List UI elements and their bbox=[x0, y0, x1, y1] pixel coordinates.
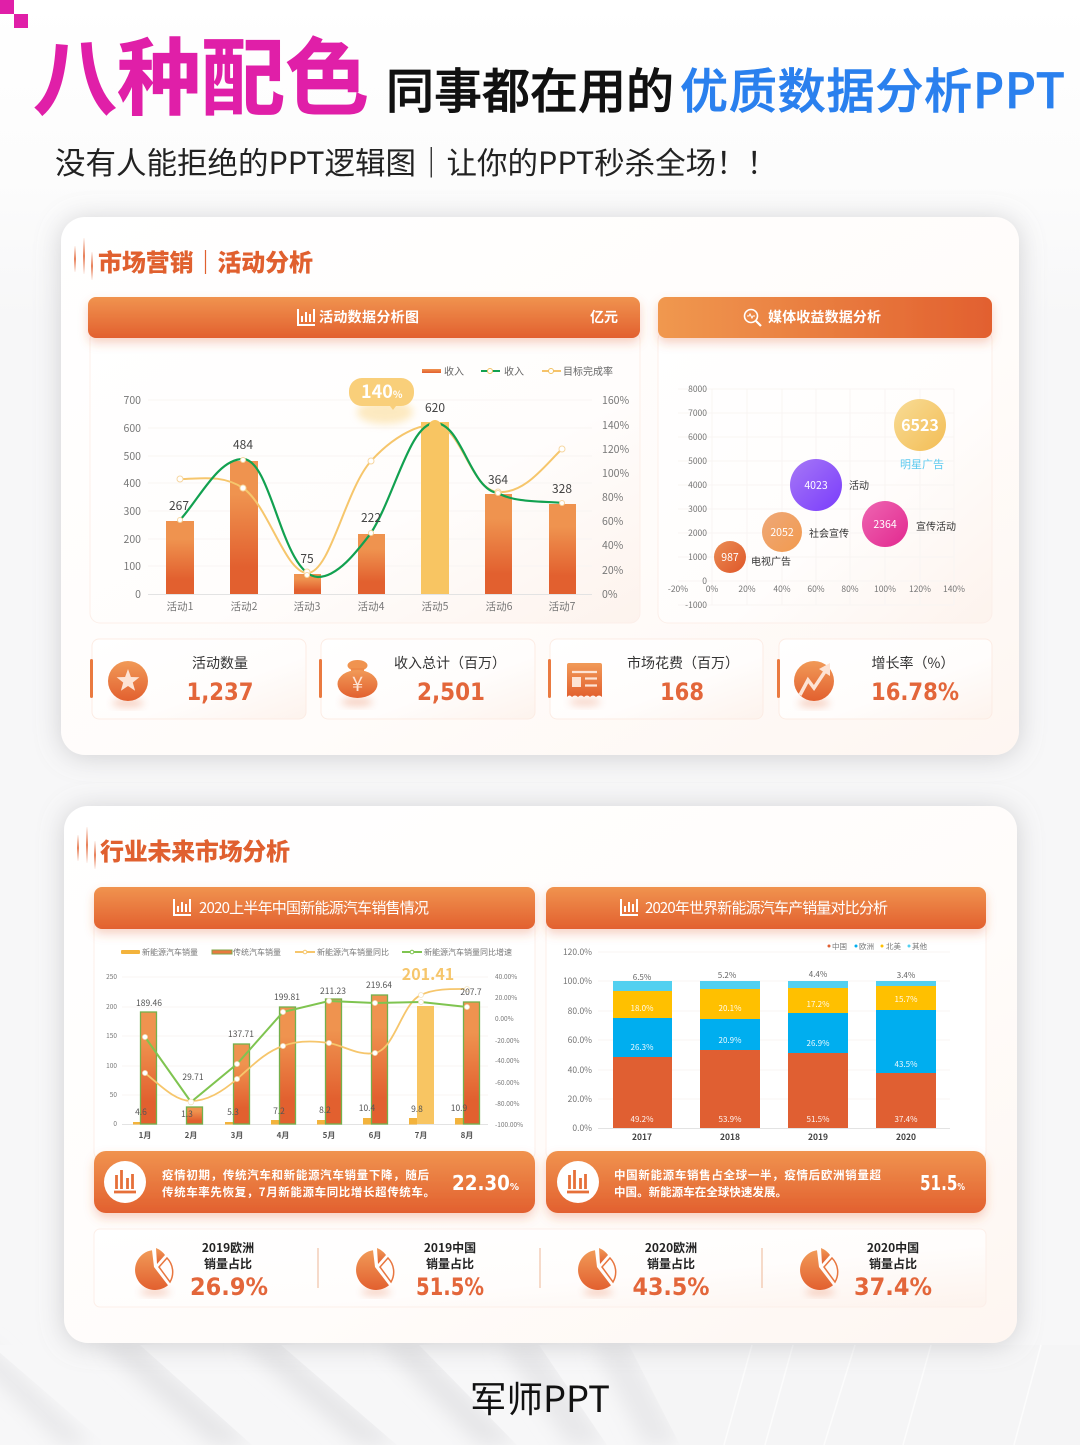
combo chart: bars and lines: 120% bbox=[602, 442, 629, 457]
legend bbox=[422, 363, 613, 378]
bubble chart: 60% bbox=[807, 583, 825, 595]
stat strip: sales share bbox=[94, 1229, 986, 1307]
stacked bar chart: 40.0% bbox=[568, 1064, 592, 1076]
combo chart: bars and lines: 活动4 bbox=[358, 599, 385, 614]
icon: corner pixel squares bbox=[0, 0, 28, 28]
legend: 传统汽车销量 bbox=[233, 947, 281, 958]
KPI card: activity count: 1,237 bbox=[186, 678, 254, 706]
KPI card: marketing spend bbox=[548, 639, 763, 719]
panel: media revenue card bbox=[658, 297, 992, 623]
combo chart: bars and lines: 60% bbox=[602, 514, 624, 529]
header bar: activity chart: 活动数据分析图 bbox=[319, 307, 419, 327]
stacked bar chart: 120.0% bbox=[563, 946, 592, 958]
bubble chart: 20% bbox=[738, 583, 756, 595]
callout bar: China sales insight bbox=[94, 1151, 535, 1213]
combo chart: monthly sales: -20.00% bbox=[495, 1035, 519, 1045]
legend: 新能源汽车销量同比增速 bbox=[424, 947, 512, 958]
combo chart: monthly sales: 5月 bbox=[323, 1130, 335, 1141]
combo chart: monthly sales: 201.41 bbox=[402, 961, 454, 985]
stat: 2019 China: 2019中国 bbox=[424, 1239, 476, 1256]
combo chart: bars and lines: 140% bbox=[602, 418, 629, 433]
combo chart: bars and lines: 活动6 bbox=[486, 599, 513, 614]
heading: marketing: 市场营销｜活动分析 bbox=[98, 243, 313, 278]
title: 八种配色 bbox=[33, 12, 369, 133]
stacked bar chart: 20.0% bbox=[568, 1093, 592, 1105]
bubble chart: 2364 bbox=[873, 517, 897, 532]
title bbox=[33, 12, 1065, 133]
combo chart: bars and lines: 222 bbox=[361, 509, 381, 526]
combo chart: bars and lines: 484 bbox=[233, 436, 253, 453]
header bar: China sales: 2020上半年中国新能源汽车销售情况 bbox=[199, 897, 429, 918]
stacked bar chart: 37.4% bbox=[895, 1114, 918, 1125]
legend bbox=[121, 947, 512, 958]
bubble chart: 电视广告 bbox=[751, 553, 791, 568]
combo chart: monthly sales bbox=[106, 961, 523, 1141]
combo chart: bars and lines: 活动5 bbox=[422, 599, 449, 614]
bubble chart: 2000 bbox=[688, 527, 707, 539]
combo chart: monthly sales: 211.23 bbox=[320, 985, 346, 997]
combo chart: monthly sales: 10.4 bbox=[359, 1102, 376, 1114]
panel: marketing activity analysis bbox=[61, 217, 1019, 755]
bubble chart: 80% bbox=[841, 583, 859, 595]
combo chart: bars and lines: 活动7 bbox=[549, 599, 576, 614]
bubble chart: 8000 bbox=[688, 383, 707, 395]
combo chart: monthly sales: 1月 bbox=[139, 1130, 151, 1141]
combo chart: bars and lines: 100 bbox=[124, 559, 141, 574]
bubble chart: 6000 bbox=[688, 431, 707, 443]
panel: China sales card bbox=[94, 887, 535, 1160]
combo chart: bars and lines: 75 bbox=[300, 550, 314, 567]
stacked bar chart: 20.9% bbox=[719, 1035, 742, 1046]
combo chart: monthly sales: -60.00% bbox=[495, 1077, 519, 1087]
stat: 2020 China: 2020中国 bbox=[867, 1239, 919, 1256]
stacked bar chart: 2018 bbox=[720, 1131, 740, 1143]
combo chart: monthly sales: 207.7 bbox=[460, 986, 482, 998]
legend: 目标完成率 bbox=[563, 363, 613, 378]
legend: 新能源汽车销量 bbox=[142, 947, 198, 958]
legend: 收入 bbox=[504, 363, 524, 378]
combo chart: monthly sales: -100.00% bbox=[495, 1119, 523, 1129]
combo chart: monthly sales: 100 bbox=[106, 1060, 117, 1070]
bubble chart: 2052 bbox=[770, 525, 794, 540]
stacked bar chart: 5.2% bbox=[718, 970, 737, 981]
combo chart: monthly sales: 4月 bbox=[277, 1130, 289, 1141]
bubble chart: 0 bbox=[702, 575, 707, 587]
combo chart: monthly sales: 8月 bbox=[461, 1130, 473, 1141]
bubble chart: 社会宣传 bbox=[809, 525, 849, 540]
header bar: activity chart: 亿元 bbox=[590, 307, 618, 327]
combo chart: monthly sales: 50 bbox=[110, 1089, 117, 1099]
stacked bar chart: 0.0% bbox=[572, 1122, 592, 1134]
combo chart: monthly sales: 219.64 bbox=[366, 979, 392, 991]
stat: 2020 Europe: 2020欧洲 bbox=[645, 1239, 697, 1256]
stacked bar chart: 26.3% bbox=[631, 1042, 654, 1053]
combo chart: monthly sales: 1.3 bbox=[181, 1108, 193, 1120]
KPI card: activity count: 活动数量 bbox=[192, 653, 248, 673]
stat: 2020 Europe bbox=[578, 1239, 710, 1301]
bubble chart: 3000 bbox=[688, 503, 707, 515]
legend bbox=[828, 941, 927, 952]
KPI card: activity count bbox=[90, 639, 306, 719]
callout: 140%: 140% bbox=[361, 378, 403, 404]
KPI card: total revenue bbox=[319, 639, 535, 719]
KPI card: total revenue: 2,501 bbox=[417, 678, 485, 706]
legend: 中国 bbox=[832, 941, 847, 952]
stacked bar chart: 2020 bbox=[896, 1131, 916, 1143]
stat: 2020 China: 37.4% bbox=[854, 1273, 932, 1301]
combo chart: monthly sales: 8.2 bbox=[319, 1104, 331, 1116]
header bar: world production: 2020年世界新能源汽车产销量对比分析 bbox=[645, 897, 888, 918]
combo chart: bars and lines: 600 bbox=[124, 421, 141, 436]
combo chart: monthly sales: 7月 bbox=[415, 1130, 427, 1141]
stat: 2020 Europe: 销量占比 bbox=[647, 1255, 695, 1272]
bubble chart: 明星广告 bbox=[900, 456, 944, 472]
legend: 其他 bbox=[912, 941, 927, 952]
stacked bar chart: 51.5% bbox=[807, 1114, 830, 1125]
combo chart: bars and lines: 700 bbox=[124, 393, 141, 408]
bubble chart: 140% bbox=[943, 583, 965, 595]
stacked bar chart: 53.9% bbox=[719, 1114, 742, 1125]
stacked bar chart: 6.5% bbox=[633, 972, 652, 983]
combo chart: monthly sales: 0.00% bbox=[495, 1013, 514, 1023]
combo chart: bars and lines: 160% bbox=[602, 393, 629, 408]
stacked bar chart: 49.2% bbox=[631, 1114, 654, 1125]
callout bar: China sales insight: 22.30% bbox=[452, 1171, 519, 1195]
stacked bar chart: 20.1% bbox=[719, 1003, 742, 1014]
combo chart: bars and lines: 20% bbox=[602, 563, 624, 578]
stacked bar chart: 3.4% bbox=[897, 970, 916, 981]
KPI card: growth rate bbox=[777, 639, 992, 719]
combo chart: monthly sales: 250 bbox=[106, 971, 117, 981]
stacked bar chart bbox=[563, 946, 950, 1143]
combo chart: monthly sales: 199.81 bbox=[274, 991, 300, 1003]
stacked bar chart: 4.4% bbox=[809, 969, 828, 980]
combo chart: bars and lines: 80% bbox=[602, 490, 624, 505]
bubble chart: 4000 bbox=[688, 479, 707, 491]
stacked bar chart: 80.0% bbox=[568, 1005, 592, 1017]
callout bar: China sales insight: 疫情初期，传统汽车和新能源汽车销量下降，随后 bbox=[162, 1167, 430, 1183]
combo chart: monthly sales: 6月 bbox=[369, 1130, 381, 1141]
stacked bar chart: 2019 bbox=[808, 1131, 828, 1143]
legend: 北美 bbox=[886, 941, 901, 952]
combo chart: bars and lines: 400 bbox=[124, 476, 141, 491]
stat: 2019 China: 销量占比 bbox=[426, 1255, 474, 1272]
KPI card: growth rate: 增长率（%） bbox=[872, 653, 954, 673]
combo chart: bars and lines: 100% bbox=[602, 466, 629, 481]
panel: activity chart card bbox=[88, 297, 640, 623]
KPI card: marketing spend: 市场花费（百万） bbox=[627, 653, 739, 673]
KPI card: marketing spend: 168 bbox=[660, 678, 704, 706]
stacked bar chart: 15.7% bbox=[895, 994, 918, 1005]
bubble chart: 6523 bbox=[901, 412, 939, 436]
stacked bar chart: 18.0% bbox=[631, 1003, 654, 1014]
combo chart: monthly sales: 137.71 bbox=[228, 1028, 254, 1040]
callout: 140% bbox=[349, 378, 414, 424]
bubble chart bbox=[668, 383, 965, 611]
legend: 新能源汽车销量同比 bbox=[317, 947, 389, 958]
header bar: media revenue: 媒体收益数据分析 bbox=[768, 307, 881, 327]
header bar: activity chart bbox=[88, 297, 640, 338]
KPI card: total revenue: ¥ bbox=[352, 668, 363, 697]
combo chart: monthly sales: 10.9 bbox=[451, 1102, 468, 1114]
combo chart: monthly sales: 9.8 bbox=[411, 1103, 423, 1115]
combo chart: bars and lines: 0 bbox=[135, 587, 141, 602]
stacked bar chart: 43.5% bbox=[895, 1059, 918, 1070]
legend: 收入 bbox=[444, 363, 464, 378]
stat: 2019 China bbox=[356, 1239, 484, 1301]
combo chart: bars and lines: 300 bbox=[124, 504, 141, 519]
panel: industry market analysis bbox=[64, 806, 1017, 1343]
combo chart: monthly sales: 200 bbox=[106, 1001, 117, 1011]
bubble chart: 987 bbox=[721, 550, 739, 565]
bubble chart: 100% bbox=[874, 583, 896, 595]
combo chart: bars and lines: 200 bbox=[124, 532, 141, 547]
stat: 2019 Europe: 2019欧洲 bbox=[202, 1239, 254, 1256]
bubble chart: 7000 bbox=[688, 407, 707, 419]
stacked bar chart: 100.0% bbox=[563, 975, 592, 987]
stacked bar chart: 2017 bbox=[632, 1131, 652, 1143]
stat: 2019 China: 51.5% bbox=[416, 1273, 484, 1301]
stacked bar chart: 60.0% bbox=[568, 1034, 592, 1046]
combo chart: bars and lines: 0% bbox=[602, 587, 618, 602]
combo chart: bars and lines: 620 bbox=[425, 399, 445, 416]
subtitle: 没有人能拒绝的PPT逻辑图｜让你的PPT秒杀全场！！ bbox=[55, 139, 777, 183]
combo chart: bars and lines: 328 bbox=[552, 480, 572, 497]
bubble chart: 活动 bbox=[849, 477, 869, 492]
bubble chart: 1000 bbox=[688, 551, 707, 563]
combo chart: bars and lines bbox=[124, 393, 629, 614]
stacked bar chart: 26.9% bbox=[807, 1038, 830, 1049]
combo chart: monthly sales: 2月 bbox=[185, 1130, 197, 1141]
stat: 2020 China bbox=[800, 1239, 932, 1301]
combo chart: bars and lines: 活动2 bbox=[231, 599, 258, 614]
callout bar: world insight: 中国新能源车销售占全球一半，疫情后欧洲销量超 bbox=[614, 1167, 882, 1183]
KPI card: total revenue: 收入总计（百万） bbox=[394, 653, 506, 673]
combo chart: bars and lines: 267 bbox=[169, 497, 189, 514]
combo chart: bars and lines: 364 bbox=[488, 471, 508, 488]
callout bar: world insight: 51.5% bbox=[920, 1171, 965, 1195]
bubble chart: 4023 bbox=[804, 478, 828, 493]
bubble chart: 宣传活动 bbox=[916, 518, 956, 533]
KPI card: growth rate: 16.78% bbox=[871, 678, 959, 706]
legend: 欧洲 bbox=[859, 941, 874, 952]
combo chart: monthly sales: 3月 bbox=[231, 1130, 243, 1141]
stacked bar chart: 17.2% bbox=[807, 999, 830, 1010]
combo chart: monthly sales: 5.3 bbox=[227, 1106, 239, 1118]
combo chart: monthly sales: -40.00% bbox=[495, 1055, 519, 1065]
bubble chart: 0% bbox=[706, 583, 718, 595]
combo chart: monthly sales: 189.46 bbox=[136, 997, 162, 1009]
combo chart: bars and lines: 活动3 bbox=[294, 599, 321, 614]
combo chart: bars and lines: 活动1 bbox=[167, 599, 194, 614]
header bar: China sales bbox=[94, 887, 535, 929]
stat: 2019 Europe bbox=[135, 1239, 268, 1301]
stat: 2020 Europe: 43.5% bbox=[632, 1273, 710, 1301]
combo chart: monthly sales: 29.71 bbox=[182, 1071, 204, 1083]
bubble chart: 5000 bbox=[688, 455, 707, 467]
bubble chart: 40% bbox=[773, 583, 791, 595]
footer credit: 军师PPT bbox=[470, 1371, 610, 1423]
combo chart: monthly sales: 4.6 bbox=[135, 1106, 147, 1118]
callout bar: China sales insight: 传统车率先恢复，7月新能源车同比增长超传统车。 bbox=[162, 1184, 435, 1200]
title: 同事都在用的 bbox=[386, 52, 674, 122]
bubble chart: 120% bbox=[909, 583, 931, 595]
stat: 2020 China: 销量占比 bbox=[869, 1255, 917, 1272]
bubble chart: -1000 bbox=[685, 599, 707, 611]
combo chart: monthly sales: 40.00% bbox=[495, 971, 517, 981]
header bar: world production bbox=[546, 887, 986, 929]
callout bar: world insight: 中国。新能源车在全球快速发展。 bbox=[614, 1184, 787, 1200]
stat: 2019 Europe: 26.9% bbox=[190, 1273, 268, 1301]
bubble chart: -20% bbox=[668, 583, 688, 595]
combo chart: monthly sales: 20.00% bbox=[495, 992, 517, 1002]
title: 优质数据分析PPT bbox=[680, 52, 1065, 122]
combo chart: bars and lines: 40% bbox=[602, 538, 624, 553]
heading: industry: 行业未来市场分析 bbox=[100, 832, 290, 867]
combo chart: monthly sales: 0 bbox=[113, 1118, 117, 1128]
combo chart: bars and lines: 500 bbox=[124, 449, 141, 464]
combo chart: monthly sales: 150 bbox=[106, 1030, 117, 1040]
header bar: media revenue bbox=[658, 297, 992, 338]
panel: world production card bbox=[546, 887, 986, 1160]
callout bar: world insight bbox=[546, 1151, 986, 1213]
combo chart: monthly sales: -80.00% bbox=[495, 1098, 519, 1108]
combo chart: monthly sales: 7.2 bbox=[273, 1105, 285, 1117]
stat: 2019 Europe: 销量占比 bbox=[204, 1255, 252, 1272]
